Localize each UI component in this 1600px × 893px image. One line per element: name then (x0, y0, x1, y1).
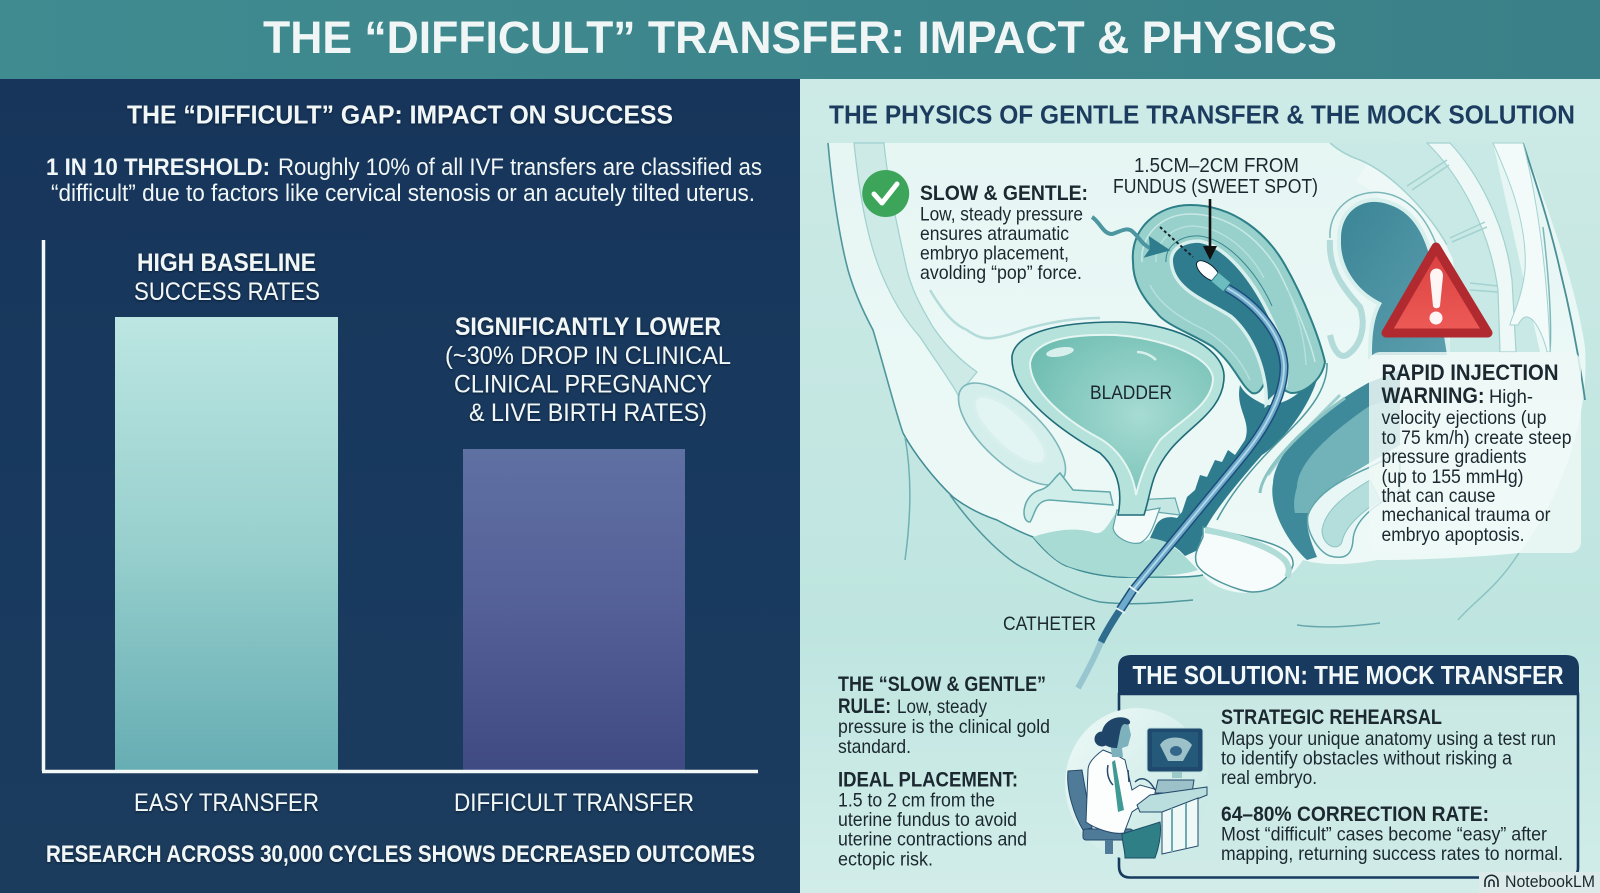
dotted distance marker (1160, 227, 1193, 257)
panel: mock transfer solution (1065, 655, 1579, 878)
abdominal wall band (854, 143, 977, 395)
rapid injection warning card (1369, 352, 1581, 553)
bladder label: BLADDER (1090, 382, 1172, 404)
icon: green check (862, 170, 909, 217)
ideal placement: uterine fundus to avoid (838, 809, 1017, 831)
bar: difficult transfer (463, 449, 685, 771)
slow and gentle callout (920, 181, 1088, 284)
bar label: high baseline: SUCCESS RATES (134, 278, 320, 306)
catheter label: CATHETER (1003, 614, 1096, 635)
research footnote: RESEARCH ACROSS 30,000 CYCLES SHOWS DECREASED OUTCOMES (46, 841, 755, 868)
sweet spot label: 1.5CM–2CM FROM (1134, 155, 1299, 177)
correction rate text: Most “difficult” cases become “easy” after (1221, 824, 1547, 846)
white urethral pocket (1113, 508, 1160, 543)
bar label: significantly lower: SIGNIFICANTLY LOWER (455, 313, 721, 341)
strategic rehearsal text (1221, 705, 1556, 789)
pelvic floor teal band (1033, 510, 1198, 577)
ligament structures (1024, 473, 1113, 522)
sweet spot label (1113, 155, 1318, 198)
threshold text block: 1 IN 10 THRESHOLD: (46, 154, 270, 181)
spine and sacrum (1330, 143, 1550, 352)
wavy flow arrow (1092, 217, 1168, 256)
threshold text block (46, 154, 762, 207)
rapid injection warning card: mechanical trauma or (1382, 504, 1551, 526)
bar label: significantly lower: & LIVE BIRTH RATES) (469, 399, 707, 427)
rapid injection warning card: embryo apoptosis. (1382, 524, 1524, 546)
bar label: significantly lower (445, 313, 731, 427)
ideal placement: uterine contractions and (838, 828, 1027, 850)
colon and rectum (1196, 192, 1447, 592)
NotebookLM watermark: NotebookLM (1505, 872, 1595, 891)
correction rate text: 64–80% CORRECTION RATE: (1221, 802, 1489, 826)
rapid injection warning card: velocity ejections (up (1382, 407, 1547, 429)
slow and gentle callout: SLOW & GENTLE: (920, 181, 1088, 205)
sweet spot arrow (1203, 199, 1217, 260)
slow and gentle callout: Low, steady pressure (920, 204, 1083, 226)
header band (0, 0, 1600, 79)
uterus (1133, 205, 1325, 400)
slow and gentle callout: embryo placement, (920, 242, 1069, 264)
threshold text block: Roughly 10% of all IVF transfers are classified as (278, 154, 762, 181)
strategic rehearsal text: Maps your unique anatomy using a test run (1221, 728, 1556, 750)
panel: physics of gentle transfer (800, 79, 1600, 893)
bar label: significantly lower: (~30% DROP IN CLINICAL (445, 342, 731, 370)
bar chart (42, 240, 758, 817)
slow and gentle rule: THE “SLOW & GENTLE” (838, 672, 1046, 696)
rapid injection warning card: High- (1489, 386, 1533, 408)
catheter (1003, 257, 1284, 688)
ideal placement (838, 768, 1027, 870)
rapid injection warning card: (up to 155 mmHg) (1382, 466, 1524, 488)
correction rate text (1221, 802, 1563, 865)
rapid injection warning card: pressure gradients (1382, 446, 1527, 468)
rapid injection warning card: that can cause (1382, 485, 1496, 507)
slow and gentle callout: avolding “pop” force. (920, 262, 1082, 284)
bar label: high baseline (134, 249, 320, 306)
sweet spot label: FUNDUS (SWEET SPOT) (1113, 176, 1318, 198)
axis label: difficult transfer: DIFFICULT TRANSFER (454, 789, 694, 817)
right panel heading: THE PHYSICS OF GENTLE TRANSFER & THE MOCK SOLUTION (829, 100, 1575, 130)
anatomy illustration (828, 143, 1586, 688)
title: THE “DIFFICULT” TRANSFER: IMPACT & PHYSICS (263, 12, 1337, 63)
ideal placement: 1.5 to 2 cm from the (838, 790, 995, 812)
slow and gentle rule: RULE: (838, 694, 891, 718)
icon: warning triangle (1386, 247, 1488, 333)
slow and gentle rule: standard. (838, 736, 911, 758)
bladder (1012, 322, 1224, 515)
left panel heading: THE “DIFFICULT” GAP: IMPACT ON SUCCESS (127, 100, 673, 130)
pubic bone (942, 366, 1082, 502)
rapid injection warning card: WARNING: (1382, 383, 1484, 408)
lower body contour (903, 433, 1203, 577)
ideal placement: ectopic risk. (838, 848, 933, 870)
rapid injection warning card: RAPID INJECTION (1382, 360, 1558, 385)
bar label: significantly lower: CLINICAL PREGNANCY (454, 370, 712, 398)
panel: impact on success (0, 79, 800, 893)
chart axes (42, 240, 758, 772)
pelvic cavity background (828, 143, 1586, 593)
strategic rehearsal text: STRATEGIC REHEARSAL (1221, 705, 1442, 729)
bar label: high baseline: HIGH BASELINE (137, 249, 316, 277)
vaginal canal (1150, 367, 1320, 556)
icon: doctor at ultrasound (1065, 708, 1209, 860)
slow and gentle callout: ensures atraumatic (920, 223, 1069, 245)
catheter tip (1193, 257, 1231, 292)
strategic rehearsal text: to identify obstacles without risking a (1221, 748, 1512, 770)
threshold text block: “difficult” due to factors like cervical stenosis or an acutely tilted uterus. (51, 180, 755, 207)
rapid injection warning card: to 75 km/h) create steep (1382, 427, 1572, 449)
axis label: easy transfer: EASY TRANSFER (134, 789, 319, 817)
slow and gentle rule: pressure is the clinical gold (838, 716, 1050, 738)
slow and gentle rule: Low, steady (897, 696, 987, 718)
slow and gentle rule (838, 672, 1050, 758)
correction rate text: mapping, returning success rates to normal. (1221, 843, 1563, 865)
bar: easy transfer (115, 317, 338, 771)
ideal placement: IDEAL PLACEMENT: (838, 768, 1018, 792)
strategic rehearsal text: real embryo. (1221, 767, 1317, 789)
